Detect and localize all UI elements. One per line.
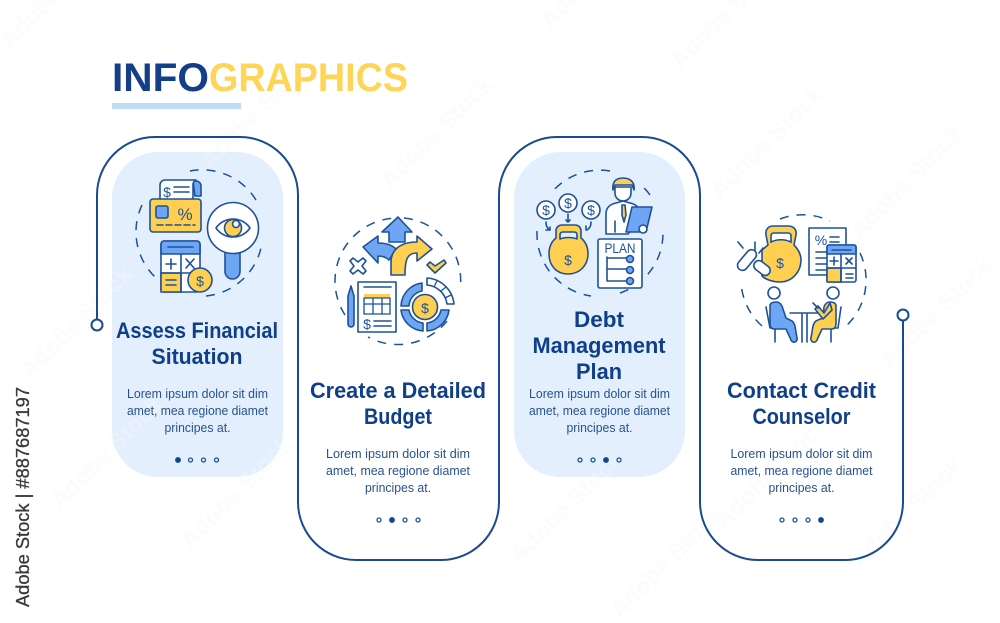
step 2 body: principes at.: [365, 481, 431, 495]
step 4 body: Lorem ipsum dolor sit dim: [730, 447, 872, 461]
step 2 heading: Budget: [364, 404, 433, 429]
step 4 body: amet, mea regione diamet: [730, 464, 873, 478]
step 4 heading: Counselor: [752, 404, 851, 429]
step 3 heading: [532, 307, 666, 384]
step 1 body: Lorem ipsum dolor sit dim: [127, 387, 268, 401]
watermark pattern: Adobe Stock: [845, 121, 968, 244]
step 2 heading: [310, 378, 486, 429]
title underline: [112, 103, 241, 109]
watermark pattern: Adobe Stock: [45, 391, 168, 514]
watermark pattern: Adobe Stock: [195, 51, 318, 174]
icon: credit counselor: [735, 215, 866, 342]
watermark pattern: Adobe Stock: [15, 261, 138, 384]
watermark pattern: Adobe Stock: [875, 251, 998, 374]
watermark pattern: Adobe Stock: [710, 411, 833, 534]
icon: debt management: $: [564, 195, 572, 211]
step 1 pagination dots: [176, 458, 218, 462]
panel: highlight card 3: [514, 152, 685, 477]
icon: debt management: [537, 170, 663, 296]
connecting outline: [97, 137, 903, 560]
icon: debt management: PLAN: [604, 240, 636, 256]
step 3 heading: Management: [532, 333, 666, 358]
step 3 heading: Debt: [574, 307, 625, 332]
step 4 pagination dots: [780, 518, 823, 522]
step 3 heading: Plan: [576, 359, 622, 384]
step 4 body: principes at.: [768, 481, 834, 495]
watermark pattern: Adobe Stock: [375, 71, 498, 194]
icon: credit counselor: %: [815, 232, 827, 248]
step 2 pagination dots: [377, 518, 420, 522]
icon: budget: $: [421, 300, 429, 316]
step 2 body: amet, mea regione diamet: [326, 464, 471, 478]
icon: debt management: $: [564, 252, 572, 268]
watermark pattern: Adobe Stock: [175, 431, 298, 554]
step 2 body: Lorem ipsum dolor sit dim: [326, 447, 470, 461]
step 3 body: amet, mea regione diamet: [529, 404, 671, 418]
watermark pattern: Adobe Stock: [705, 81, 828, 204]
step 3 body: Lorem ipsum dolor sit dim: [529, 387, 670, 401]
step 4 body: [730, 447, 873, 495]
panel: highlight card 1: [112, 152, 283, 477]
step 1 heading: Situation: [152, 344, 242, 369]
step 3 pagination dots: [578, 458, 621, 462]
icon: debt management: $: [587, 202, 595, 218]
icon: debt management: $: [542, 202, 550, 218]
step 1 body: principes at.: [164, 421, 230, 435]
icon: assess finances: %: [177, 205, 193, 224]
step 3 body: [529, 387, 671, 435]
step 4 heading: [727, 378, 877, 429]
icon: credit counselor: $: [776, 255, 784, 271]
step 3 body: principes at.: [566, 421, 632, 435]
step 4 heading: Contact Credit: [727, 378, 877, 403]
step 1 heading: [116, 318, 278, 369]
start node: [92, 320, 102, 330]
icon: assess finances: $: [196, 273, 204, 289]
title: [112, 56, 408, 100]
watermark pattern: Adobe Stock: [505, 446, 628, 569]
step 1 body: [127, 387, 269, 435]
end node: [898, 310, 908, 320]
icon: budget: [335, 217, 461, 345]
step 2 heading: Create a Detailed: [310, 378, 486, 403]
stock id side label: Adobe Stock | #887687197: [13, 387, 33, 607]
watermark pattern: Adobe Stock: [605, 501, 728, 623]
icon: assess finances: $: [163, 184, 171, 200]
title: INFO: [112, 56, 209, 100]
icon: assess finances: [136, 170, 262, 296]
watermark pattern: Adobe Stock: [845, 451, 968, 574]
icon: budget: $: [363, 316, 371, 332]
step 2 body: [326, 447, 471, 495]
title: GRAPHICS: [209, 56, 408, 100]
step 1 body: amet, mea regione diamet: [127, 404, 269, 418]
step 1 heading: Assess Financial: [116, 318, 278, 343]
